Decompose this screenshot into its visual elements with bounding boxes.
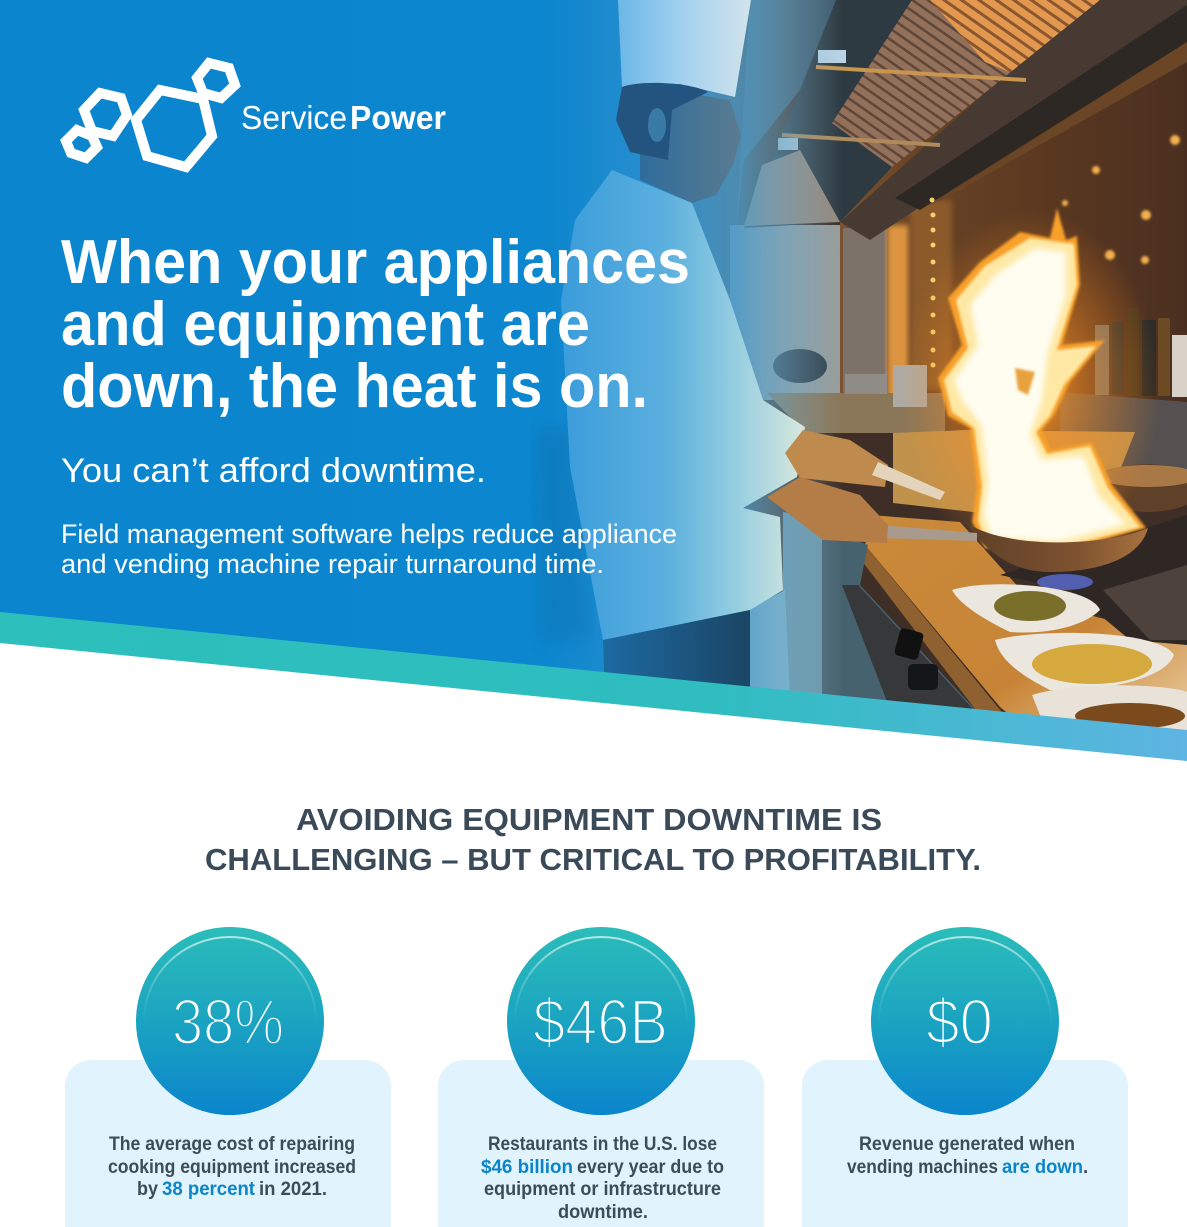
stat description: downtime. (558, 1202, 648, 1223)
stat circle (136, 927, 324, 1115)
bottles on shelf (1095, 318, 1187, 397)
stat description (481, 1134, 724, 1223)
stat description (108, 1134, 356, 1200)
hero title: When your appliances (61, 228, 690, 297)
panel: stat 46 billion (438, 927, 764, 1227)
section heading: AVOIDING EQUIPMENT DOWNTIME IS (296, 802, 882, 837)
gas burner and grates (1000, 515, 1187, 645)
kitchen background wall (692, 0, 1187, 712)
logo: ServicePower (66, 63, 446, 167)
stat description: $46 billion (481, 1157, 573, 1178)
stat circle (507, 927, 695, 1115)
stat description: vending machines (847, 1157, 998, 1178)
stat description: cooking equipment increased (108, 1157, 356, 1178)
card background (65, 1060, 391, 1227)
stat circle: 38% (172, 986, 284, 1058)
logo hexagons (66, 63, 235, 167)
stat description: Restaurants in the U.S. lose (488, 1134, 717, 1155)
card background (438, 1060, 764, 1227)
stat description: every year due to (577, 1157, 724, 1178)
panel: stat zero revenue (802, 927, 1128, 1227)
stat description: The average cost of repairing (109, 1134, 355, 1155)
hero subtitle: You can’t afford downtime. (61, 452, 486, 490)
extractor hood (736, 0, 1187, 240)
hero kitchen photo panel (0, 0, 1187, 740)
flame (938, 208, 1146, 552)
flame glow (910, 221, 1154, 552)
stat circle: $0 (926, 986, 993, 1058)
hero description: and vending machine repair turnaround time. (61, 549, 604, 579)
back counter and ledge (767, 349, 1187, 515)
teal diagonal band (0, 612, 1187, 761)
hero title: and equipment are (61, 290, 590, 359)
panel: stat 38 percent (65, 927, 391, 1227)
section heading (205, 802, 981, 877)
blue overlay on hero (0, 0, 836, 694)
stat description: by (137, 1179, 158, 1200)
stat description: in 2021. (259, 1179, 327, 1200)
hero description (61, 519, 677, 579)
string of lights (930, 198, 936, 368)
stat circle: $46B (533, 986, 668, 1058)
card background (802, 1060, 1128, 1227)
section heading: CHALLENGING – BUT CRITICAL TO PROFITABILITY. (205, 842, 981, 877)
chef jacket (561, 170, 805, 640)
stat description: equipment or infrastructure (484, 1179, 721, 1200)
logo wordmark: Power (350, 99, 446, 136)
stainless counter top (864, 516, 1187, 716)
stat description (847, 1134, 1088, 1178)
range front and knobs (748, 512, 975, 709)
chef head (616, 83, 741, 203)
stat description: 38 percent (162, 1179, 256, 1200)
hero title: down, the heat is on. (61, 352, 648, 421)
chef hands and tongs (767, 430, 945, 543)
chef trousers (603, 610, 750, 687)
logo wordmark: Service (241, 99, 347, 136)
chef hat (618, 0, 751, 97)
stat circle (871, 927, 1059, 1115)
frying pan (880, 522, 1148, 572)
serving bowls (952, 584, 1187, 740)
hero title (61, 228, 690, 421)
stat description: Revenue generated when (859, 1134, 1075, 1155)
stat description: are down (1002, 1157, 1083, 1178)
stat description: . (1083, 1157, 1088, 1178)
hero description: Field management software helps reduce appliance (61, 519, 677, 549)
background figure shadow (539, 434, 586, 636)
